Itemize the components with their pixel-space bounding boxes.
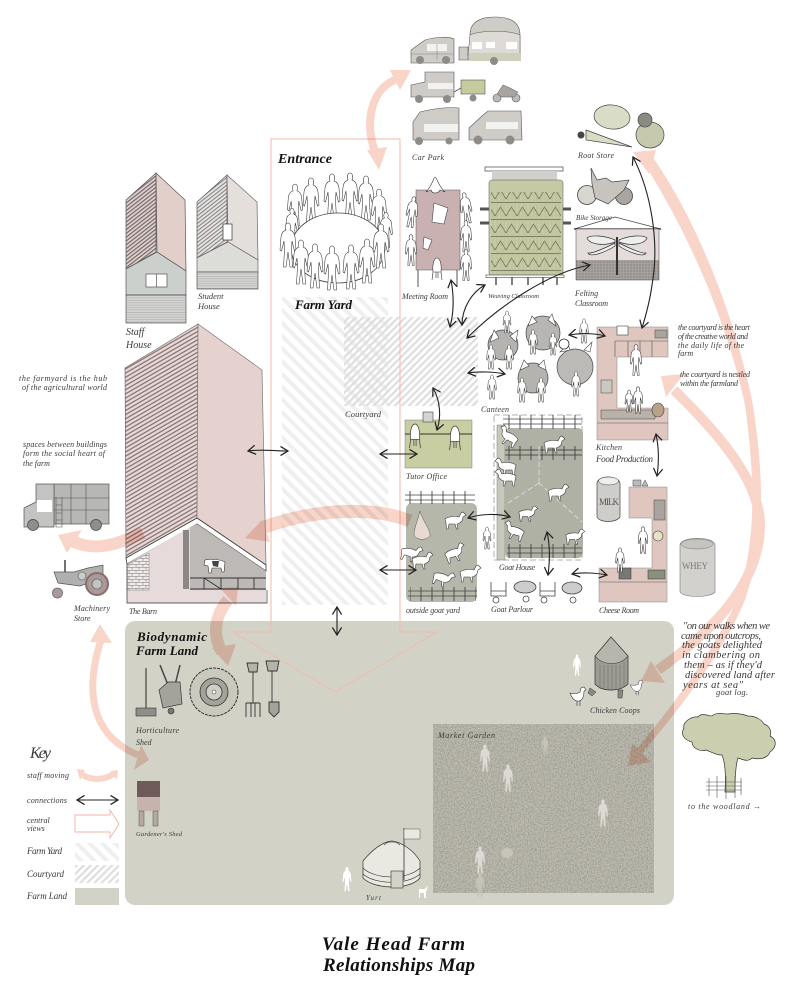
key swatch: farm yard: [75, 843, 119, 861]
icon: tractor: [52, 560, 108, 598]
heading: entrance: Entrance: [277, 152, 332, 167]
heading: farm land: Farm Land: [135, 643, 198, 658]
icon: whey churn: WHEY: [682, 561, 708, 571]
annotation: courtyard nestled: [680, 370, 751, 388]
quote: goat log: came upon outcrops,: [681, 631, 761, 642]
label: kitchen food production: [595, 443, 654, 464]
label: goat house: Goat House: [499, 563, 535, 572]
ribbon: barn to horticulture shed: [212, 587, 238, 666]
quote: goat log: years at sea": [682, 680, 744, 691]
vehicle: caravan: [459, 17, 521, 65]
label: gardener's shed: Gardener's Shed: [136, 831, 183, 838]
icon: cow: [204, 559, 225, 573]
label: market garden: Market Garden: [437, 731, 495, 740]
label: staff house: [125, 327, 152, 351]
label: cheese room: Cheese Room: [599, 606, 639, 615]
arrow: meeting room to courtyard: [450, 280, 453, 327]
label: chicken coops: Chicken Coops: [590, 706, 640, 715]
key swatch: central views: [75, 810, 119, 838]
icon: rock: [414, 511, 430, 539]
quote: goat log: in clambering on: [682, 650, 760, 661]
icon: wheelbarrow: [159, 665, 182, 714]
annotation: farmyard hub: of the agricultural world: [22, 383, 108, 392]
building: tutor office: [405, 412, 472, 468]
label: the barn: The Barn: [129, 607, 157, 616]
title: Vale Head Farm: [322, 934, 465, 955]
central views outline arrow: [233, 139, 437, 692]
building: goat parlour: [491, 581, 582, 603]
label: horticulture shed: Horticulture: [135, 726, 179, 735]
label: felting classroom: [574, 289, 608, 308]
label: yurt: Yurt: [366, 894, 382, 902]
key label: staff moving: staff moving: [27, 771, 69, 780]
icon: yurt: [363, 828, 420, 888]
label: machinery store: Store: [74, 614, 91, 623]
key label: central views: views: [27, 824, 45, 833]
arrow: root store to kitchen: [633, 157, 655, 328]
label: weaving classroom: Weaving Classroom: [488, 293, 539, 300]
key swatch: connections: [77, 799, 118, 801]
quote: goat log: them – as if they'd: [684, 660, 763, 671]
figure: chickens: [570, 654, 643, 706]
vehicle: van: [469, 111, 522, 144]
staff movement ribbons: [58, 70, 761, 770]
icon: motorbike: [578, 168, 632, 204]
key panel: [26, 745, 119, 905]
title: Relationships Map: [322, 955, 475, 976]
label: staff house: House: [125, 340, 152, 351]
quote: goat log: discovered land after: [685, 670, 776, 681]
label: felting classroom: Felting: [574, 289, 598, 298]
label: tutor office: Tutor Office: [406, 472, 447, 481]
quote: goat log: "on our walks when we: [683, 621, 770, 632]
arrow: farm yard to land: [336, 607, 338, 635]
key label: central views: central: [27, 816, 50, 825]
ribbon: car park to entrance: [367, 70, 411, 170]
icon: milk churn: MILK: [599, 497, 620, 507]
arrow: weaving to courtyard: [462, 285, 485, 325]
arrow: parlour to cheese room: [572, 573, 607, 575]
quote: goat log: the goats delighted: [682, 640, 763, 651]
label: staff house: Staff: [126, 327, 146, 338]
vehicle: minibus: [413, 108, 459, 145]
annotation: farmyard hub: [19, 374, 108, 392]
building: the barn: [125, 324, 267, 603]
label: meeting room: Meeting Room: [401, 292, 448, 301]
arrow: tutor to courtyard: [433, 388, 440, 430]
label: courtyard: Courtyard: [345, 409, 382, 419]
label: to the woodland: to the woodland →: [688, 802, 761, 811]
icon: tree: [682, 714, 775, 799]
building: outside goat yard: [399, 491, 481, 602]
key swatch: courtyard: [75, 865, 119, 883]
building: student house: [197, 175, 258, 289]
arrow: farm yard to goat yard: [380, 569, 416, 571]
label: bike storage: Bike Storage: [576, 214, 612, 222]
icon: spade: [266, 661, 279, 717]
icon: fork: [246, 663, 260, 717]
arrow: courtyard to canteen: [468, 372, 505, 374]
arrow: kitchen to cheese room: [656, 434, 658, 476]
icons: root store produce: [578, 103, 664, 148]
label: goat parlour: Goat Parlour: [491, 605, 534, 614]
arrow: barn to farm yard: [248, 449, 288, 452]
annotation: courtyard heart: of the creative world and: [678, 332, 749, 341]
key label: connections: connections: [27, 796, 67, 805]
icon: gardener's shed: [137, 781, 160, 826]
title: [322, 934, 475, 976]
label: horticulture shed: Shed: [136, 738, 153, 747]
courtyard hatch area: [344, 317, 478, 406]
annotation: courtyard heart: [678, 323, 751, 358]
label: student house: [197, 291, 224, 311]
key label: farm yard: Farm Yard: [26, 846, 62, 856]
key swatch: staff moving: [77, 769, 118, 780]
annotation: courtyard heart: farm: [678, 349, 693, 358]
label: machinery store: [73, 604, 110, 623]
key label: farm land: Farm Land: [26, 891, 68, 901]
market garden plot: [433, 724, 654, 897]
building: felting classroom: [574, 217, 661, 280]
label: student house: House: [197, 301, 220, 311]
arrow: goat yard to goat house: [468, 514, 510, 518]
figure: yurt person: [343, 867, 351, 891]
ribbon: goat yard to barn: [245, 511, 410, 542]
label: student house: Student: [198, 291, 224, 301]
heading: farm land: Biodynamic: [136, 629, 207, 644]
arrow: felting to courtyard: [467, 265, 590, 338]
building: kitchen: [597, 326, 668, 440]
label: kitchen food production: Food Production: [595, 454, 654, 464]
building: weaving classroom: [480, 167, 571, 285]
key swatch: farm land: [75, 888, 119, 905]
annotation: courtyard nestled: the courtyard is nestled: [680, 370, 751, 379]
icon: whey churn: [680, 538, 715, 596]
quote: goat log: goat log.: [716, 687, 748, 697]
label: root store: Root Store: [577, 151, 614, 160]
icon: wheel: [190, 668, 238, 716]
annotation: spaces between buildings: [23, 440, 107, 468]
annotation: courtyard heart: the courtyard is the heart: [678, 323, 751, 332]
vehicles: car park: [411, 17, 522, 145]
label: canteen: Canteen: [481, 405, 509, 414]
annotation: farmyard hub: the farmyard is the hub: [19, 374, 107, 383]
building: staff house: [126, 173, 186, 323]
key heading: Key: [29, 745, 52, 762]
quote: goat log: [681, 621, 776, 697]
icon: chicken coop: [588, 637, 628, 698]
key label: courtyard: Courtyard: [27, 869, 64, 879]
heading: farm yard: Farm Yard: [294, 297, 352, 312]
figure ring: entrance people: [280, 173, 392, 290]
ribbon: barn to truck: [58, 530, 143, 553]
arrow: farm yard to tutor office: [380, 453, 417, 455]
key label: central views: [27, 816, 50, 833]
building: goat house: [494, 415, 585, 560]
farm yard hatch area: [282, 297, 388, 605]
figure: yurt goat: [419, 885, 428, 898]
building: cheese room: [599, 480, 667, 602]
arrow: canteen to kitchen: [569, 334, 605, 336]
label: kitchen food production: Kitchen: [595, 443, 622, 452]
label: car park: Car Park: [412, 153, 444, 162]
vehicle: land rover and trailer: [411, 72, 485, 103]
annotation: spaces between buildings: form the social heart of: [23, 449, 107, 458]
ribbon: root store to market garden: [628, 150, 761, 766]
figure: goat herd person: [483, 527, 491, 549]
heading: farm land: [135, 629, 207, 658]
vehicle: car: [411, 37, 454, 64]
icon: brush: [136, 668, 156, 716]
annotation: spaces between buildings: spaces between buildings: [23, 440, 107, 449]
annotation: courtyard nestled: within the farmland: [680, 379, 739, 388]
icon: dragonfly: [587, 236, 647, 275]
canteen tables: [487, 311, 593, 402]
building: meeting room: [404, 177, 474, 287]
connection arrows: [248, 157, 658, 635]
annotation: courtyard heart: the daily life of the: [678, 341, 744, 350]
vehicle: small motorbike: [493, 85, 520, 102]
label: outside goat yard: outside goat yard: [406, 606, 461, 615]
annotation: spaces between buildings: the farm: [23, 459, 50, 468]
farm land panel: [125, 621, 674, 905]
ribbon: machinery store to gardener's shed: [90, 624, 149, 770]
ribbon: kitchen to chicken coops: [641, 374, 760, 683]
label: horticulture shed: [135, 726, 179, 747]
icon: truck: [24, 484, 109, 530]
arrow: goat house to parlour: [547, 532, 549, 575]
label: felting classroom: Classroom: [575, 299, 608, 308]
label: machinery store: Machinery: [73, 604, 110, 613]
icon: milk churn: [597, 477, 620, 522]
